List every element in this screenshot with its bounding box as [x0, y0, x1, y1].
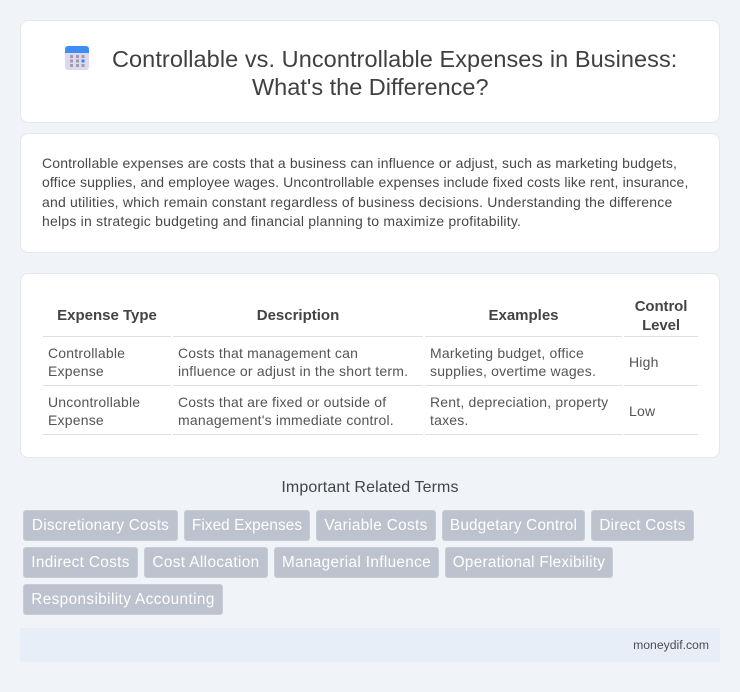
- text block: introduction: Controllable expenses are costs that a business can influence or adjust, such as marketing budgets,: [42, 155, 677, 171]
- table row: uncontrollable expense: Rent, depreciation, property: [430, 394, 608, 410]
- heading: related terms: Important Related Terms: [281, 479, 459, 496]
- table row: controllable expense: influence or adjust in the short term.: [178, 363, 408, 379]
- panel: comparison table: [20, 273, 720, 458]
- text block: introduction: office supplies, and employee wages. Uncontrollable expenses include fixed costs like rent, insurance,: [42, 174, 688, 190]
- title: [112, 46, 677, 100]
- footer source text: moneydif.com: [633, 638, 709, 652]
- text block: introduction: and utilities, which remain constant regardless of business decisions. Understanding the difference: [42, 194, 672, 210]
- tag list: related terms: Discretionary Costs: [32, 517, 169, 534]
- tag list: related terms: Cost Allocation: [152, 554, 260, 571]
- table row: controllable expense: Marketing budget, office: [430, 345, 584, 361]
- table header: Description: [257, 307, 339, 324]
- tag list: related terms: Indirect Costs: [31, 554, 130, 571]
- panel: introduction: [20, 133, 720, 253]
- tag list: related terms: Managerial Influence: [282, 554, 431, 571]
- tag list: related terms: Fixed Expenses: [192, 517, 302, 534]
- panel: title card: What's the Difference?: [252, 74, 489, 100]
- tag list: related terms: Operational Flexibility: [453, 554, 605, 571]
- table header: Expense Type: [57, 307, 157, 324]
- table header: Examples: [488, 307, 559, 324]
- table row: uncontrollable expense: Expense: [48, 412, 104, 428]
- table row: controllable expense: Expense: [48, 363, 104, 379]
- tag list: related terms: Budgetary Control: [450, 517, 577, 534]
- table row: controllable expense: supplies, overtime wages.: [430, 363, 596, 379]
- panel: title card: Controllable vs. Uncontrollable Expenses in Business:: [112, 46, 677, 72]
- tag list: related terms: [23, 510, 694, 615]
- table row: uncontrollable expense: Low: [629, 403, 655, 419]
- text block: introduction: helps in strategic budgeting and financial planning to maximize profitability.: [42, 213, 521, 229]
- table header: Control: [635, 298, 687, 315]
- table row: uncontrollable expense: Uncontrollable: [48, 394, 140, 410]
- table row: uncontrollable expense: management's immediate control.: [178, 412, 394, 428]
- icon: calendar: [65, 46, 89, 70]
- tag list: related terms: Responsibility Accounting: [31, 591, 215, 608]
- table row: uncontrollable expense: Costs that are fixed or outside of: [178, 394, 386, 410]
- table header: [57, 298, 687, 334]
- tag list: related terms: Direct Costs: [599, 517, 686, 534]
- text block: introduction: [42, 155, 688, 229]
- footer: [20, 628, 720, 662]
- table row: controllable expense: [48, 345, 659, 379]
- table header: Level: [642, 317, 680, 334]
- table row: controllable expense: Controllable: [48, 345, 125, 361]
- table row: uncontrollable expense: [48, 394, 656, 428]
- panel: title card: [20, 20, 720, 123]
- tag list: related terms: Variable Costs: [324, 517, 428, 534]
- table row: controllable expense: Costs that management can: [178, 345, 358, 361]
- table row: uncontrollable expense: taxes.: [430, 412, 469, 428]
- table row: controllable expense: High: [629, 354, 659, 370]
